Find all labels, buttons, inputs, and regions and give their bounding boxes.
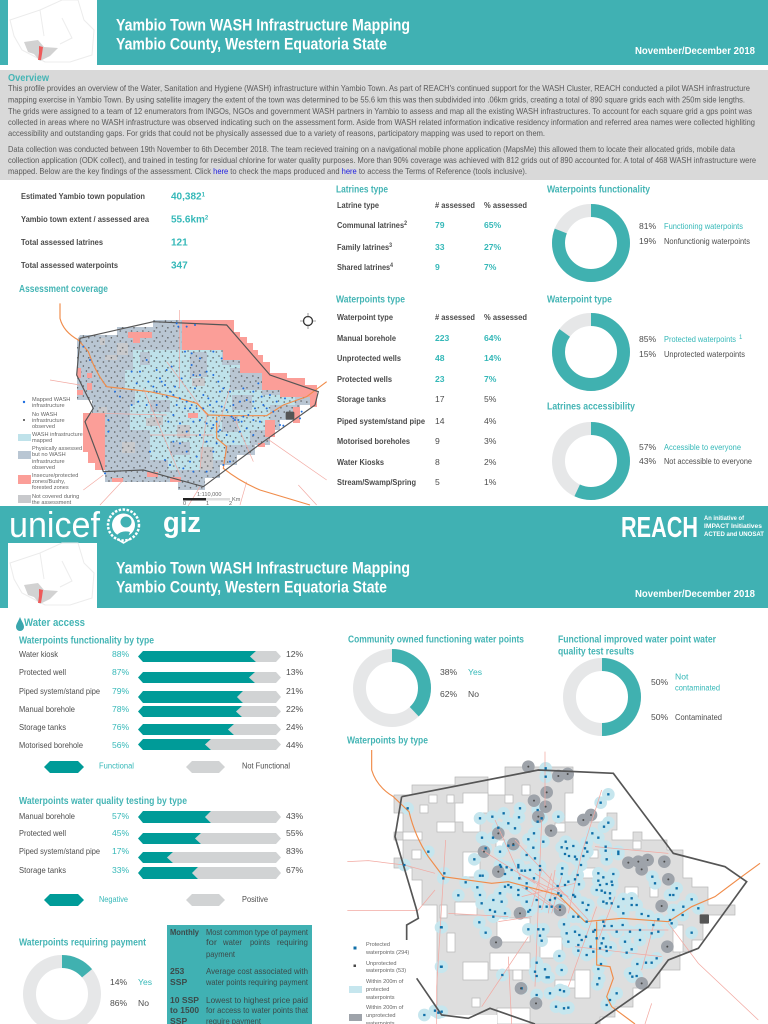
logo: REACH: IMPACT Initiatives xyxy=(704,523,762,530)
row labels: Piped system/stand pipe xyxy=(19,686,100,696)
donut chart 85% xyxy=(558,320,624,384)
title bottom: Yambio Town WASH Infrastructure Mapping xyxy=(116,558,410,578)
map legend: infrastructure xyxy=(32,418,65,424)
legend: 15% xyxy=(639,349,657,359)
table: latrines type: Latrine type xyxy=(337,200,379,210)
table: waterpoints type: Stream/Swamp/Spring xyxy=(337,477,416,487)
overview text: mapped. Below are the key findings of the assessment. Click here to check the maps produced and here to access the Terms of Reference (tools inclusive). xyxy=(8,166,527,176)
heading: Waterpoint type xyxy=(547,294,612,306)
water point buffers xyxy=(404,768,698,1015)
row labels: Piped system/stand pipe xyxy=(19,846,100,856)
key figures xyxy=(21,191,209,272)
callout: payment figures: requiring xyxy=(277,937,308,947)
legend: Positive xyxy=(242,894,268,904)
map legend: but no WASH xyxy=(32,452,66,458)
legend: Nonfunctionig waterpoints xyxy=(664,236,750,246)
map legend: Protected xyxy=(366,942,390,948)
legend xyxy=(110,977,152,1008)
key figures: 121 xyxy=(171,238,188,248)
map legend: Insecure/protected xyxy=(32,473,78,479)
callout: payment figures: Average cost associated with xyxy=(206,966,308,976)
logo: unicef: unicef xyxy=(9,504,101,545)
callout: payment figures: Monthly xyxy=(170,927,199,937)
row labels: Protected well xyxy=(19,667,66,677)
key figures: Estimated Yambio town population xyxy=(21,191,145,201)
table: waterpoints type: Piped system/stand pipe xyxy=(337,416,425,426)
callout: payment figures: payment xyxy=(206,949,236,959)
title bottom: Yambio County, Western Equatoria State xyxy=(116,578,387,596)
scale bar: 2 xyxy=(229,501,232,507)
table: latrines type: 33 xyxy=(435,242,445,252)
row labels: 17% xyxy=(112,846,130,856)
legend xyxy=(440,667,482,699)
table: latrines type: 27% xyxy=(484,242,502,252)
callout: payment figures: water points requiring payment xyxy=(205,977,309,987)
table: waterpoints type: 4% xyxy=(484,416,497,426)
legend: 1 xyxy=(739,335,743,341)
heading: Waterpoints functionality xyxy=(547,184,650,196)
table: waterpoints type: 48 xyxy=(435,353,445,363)
logo: REACH: An initiative of xyxy=(704,515,745,522)
table: waterpoints type: 14% xyxy=(484,353,502,363)
table: waterpoints type: # assessed xyxy=(435,312,475,322)
icon: compass xyxy=(300,313,316,329)
callout: payment figures: for access to water points that xyxy=(206,1005,309,1015)
title top xyxy=(116,16,410,54)
legend xyxy=(639,442,752,466)
table: latrines type: 79 xyxy=(435,220,445,230)
panel: waterpoints functionality xyxy=(547,184,750,276)
scale bar: Km xyxy=(232,497,241,503)
table: latrines type xyxy=(336,184,527,272)
callout: payment figures: for xyxy=(206,937,217,947)
locator map bottom xyxy=(8,543,97,609)
row labels: Storage tanks xyxy=(19,865,66,875)
row labels: 88% xyxy=(112,649,130,659)
row labels: 79% xyxy=(112,686,130,696)
header band bottom xyxy=(0,504,768,609)
legend: Accessible to everyone xyxy=(664,442,741,452)
scale bar: 1 xyxy=(206,501,209,507)
callout: payment figures: Lowest to highest price paid xyxy=(206,995,308,1005)
table: waterpoints type: Unprotected wells xyxy=(337,353,401,363)
table: waterpoints type: Protected wells xyxy=(337,374,392,384)
date bottom: November/December 2018 xyxy=(635,588,755,600)
map legend: Not covered during xyxy=(32,494,79,500)
row labels: 56% xyxy=(112,740,130,750)
legend: 14% xyxy=(110,977,128,987)
legend: Not accessible to everyone xyxy=(664,456,752,466)
heading: Functional improved water point water xyxy=(558,634,716,646)
legend: 19% xyxy=(639,236,657,246)
legend: contaminated xyxy=(675,682,720,692)
map legend: the assessment xyxy=(32,500,72,506)
heading: quality test results xyxy=(558,646,634,658)
map legend: observed xyxy=(32,465,55,471)
row labels: 67% xyxy=(286,865,304,875)
legend xyxy=(44,760,290,773)
callout: payment figures: Most common type of payment xyxy=(206,927,309,937)
table: waterpoints type: Water Kiosks xyxy=(337,457,384,467)
callout: payment figures xyxy=(167,925,312,1024)
table: latrines type: 2 xyxy=(404,221,408,227)
table: waterpoints type: 8 xyxy=(435,457,440,467)
callout: payment figures: 10 SSP xyxy=(170,995,199,1005)
row labels xyxy=(19,649,304,750)
panel: functional improved water point water quality test results xyxy=(558,634,722,730)
legend xyxy=(639,221,750,246)
table: waterpoints type: 5% xyxy=(484,394,497,404)
row labels: 44% xyxy=(286,740,304,750)
map legend: forested zones xyxy=(32,485,69,491)
table: waterpoints type: 23 xyxy=(435,374,445,384)
table: waterpoints type: 5 xyxy=(435,477,440,487)
map legend: Unprotected xyxy=(366,961,396,967)
heading xyxy=(558,634,716,658)
panel: waterpoints functionality by type xyxy=(19,634,304,773)
map legend: observed xyxy=(32,424,55,430)
scale bar: 1:110,000 xyxy=(197,492,221,498)
heading: Waterpoints requiring payment xyxy=(19,936,146,948)
map legend: zones/Bushy, xyxy=(32,479,66,485)
table: waterpoints type: % assessed xyxy=(484,312,527,322)
callout: payment figures: SSP xyxy=(170,977,187,987)
table: latrines type: 9 xyxy=(435,262,440,272)
table: latrines type: Family latrines xyxy=(337,242,397,252)
legend: Functional xyxy=(99,760,134,770)
overview heading: Overview xyxy=(8,72,50,84)
scale bar xyxy=(183,492,241,507)
legend: 50% xyxy=(651,712,669,722)
row labels: Protected well xyxy=(19,828,66,838)
icon: water drop xyxy=(16,617,24,631)
map legend: waterpoints xyxy=(365,995,395,1001)
logo: REACH: ACTED and UNOSAT xyxy=(704,531,764,538)
row labels: 87% xyxy=(112,667,130,677)
section heading: water access: Water access xyxy=(24,617,85,629)
panel: waterpoint type xyxy=(547,294,745,384)
map legend: WASH infrastructure xyxy=(32,432,83,438)
locator map top xyxy=(8,0,97,65)
callout: payment figures: to 1500 xyxy=(170,1005,199,1015)
logo: giz: giz xyxy=(163,507,201,539)
map: waterpoints by type xyxy=(347,750,760,1024)
legend: Yes xyxy=(468,667,482,677)
table: waterpoints type: 223 xyxy=(435,333,450,343)
panel: community owned functioning water points xyxy=(348,634,524,720)
legend: 38% xyxy=(440,667,458,677)
table: waterpoints type: Manual borehole xyxy=(337,333,396,343)
table: waterpoints type xyxy=(336,294,527,487)
row labels: Motorised borehole xyxy=(19,740,83,750)
row labels: 43% xyxy=(286,811,304,821)
legend: 86% xyxy=(110,998,128,1008)
legend: Functioning waterpoints xyxy=(664,221,743,231)
heading: Community owned functioning water points xyxy=(348,634,524,646)
row labels: 24% xyxy=(286,722,304,732)
table: latrines type: Communal latrines xyxy=(337,220,414,230)
heading: latrines type: Latrines type xyxy=(336,184,388,196)
heading: Waterpoints functionality by type xyxy=(19,634,154,646)
callout: payment figures: 253 xyxy=(170,966,185,976)
legend: 81% xyxy=(639,221,657,231)
row labels xyxy=(19,811,304,875)
map legend xyxy=(18,397,83,506)
callout: payment figures: water xyxy=(222,937,242,947)
key figures: Total assessed latrines xyxy=(21,237,103,247)
row labels: 12% xyxy=(286,649,304,659)
stacked bars xyxy=(138,811,281,879)
panel: waterpoints requiring payment xyxy=(19,936,152,1024)
key figures: 55.6km xyxy=(171,214,205,226)
legend: Not Functional xyxy=(242,760,290,770)
table: waterpoints type: Waterpoint type xyxy=(337,312,393,322)
map legend: infrastructure xyxy=(32,403,65,409)
legend: No xyxy=(468,689,479,699)
section heading: water access xyxy=(16,617,85,631)
row labels: 76% xyxy=(112,722,130,732)
table: waterpoints type: 1% xyxy=(484,477,497,487)
map legend: infrastructure xyxy=(32,459,65,465)
map legend: unprotected xyxy=(366,1013,396,1019)
row labels: 33% xyxy=(112,865,130,875)
table: waterpoints type: 14 xyxy=(435,416,445,426)
map legend: waterpoints (294) xyxy=(365,950,409,956)
legend: Protected waterpoints xyxy=(664,334,736,344)
title bottom xyxy=(116,558,410,596)
logo: REACH: REACH xyxy=(621,512,698,544)
heading: Waterpoints water quality testing by type xyxy=(19,795,187,807)
stacked bars xyxy=(138,651,281,750)
table: latrines type: % assessed xyxy=(484,200,527,210)
row labels: Storage tanks xyxy=(19,722,66,732)
key figures: Yambio town extent / assessed area xyxy=(21,214,149,224)
row labels: 55% xyxy=(286,828,304,838)
legend: 50% xyxy=(651,677,669,687)
overview text: accessibility and outstanding gaps. For grids that could not be physically assessed due to a variety of reasons, participatory mapping was used to report on them. xyxy=(8,128,545,138)
callout: payment figures: points xyxy=(250,937,270,947)
table: waterpoints type: 7% xyxy=(484,374,497,384)
row labels: Manual borehole xyxy=(19,704,75,714)
table: waterpoints type: Motorised boreholes xyxy=(337,436,410,446)
map legend: mapped xyxy=(32,438,52,444)
legend xyxy=(651,672,722,722)
table: latrines type: 3 xyxy=(389,243,393,249)
table: waterpoints type: 17 xyxy=(435,394,445,404)
table: latrines type: 4 xyxy=(390,263,394,269)
key figures: 40,382 xyxy=(171,192,202,202)
legend: Yes xyxy=(138,977,152,987)
key figures: 347 xyxy=(171,260,188,272)
water point markers xyxy=(404,768,698,1015)
map legend: No WASH xyxy=(32,412,57,418)
map legend: Mapped WASH xyxy=(32,397,70,403)
panel: waterpoints water quality testing by type xyxy=(19,795,304,906)
row labels: 22% xyxy=(286,704,304,714)
donut chart 14% xyxy=(30,962,94,1024)
heading: waterpoints by type: Waterpoints by type xyxy=(347,734,428,746)
table: waterpoints type: 9 xyxy=(435,436,440,446)
heading: waterpoints type: Waterpoints type xyxy=(336,294,405,306)
row labels: 13% xyxy=(286,667,304,677)
scale bar: 0 xyxy=(183,501,186,507)
heading: assessment coverage: Assessment coverage xyxy=(19,283,108,295)
row labels: 21% xyxy=(286,686,304,696)
donut chart 57% xyxy=(558,428,624,494)
legend: 43% xyxy=(639,456,657,466)
table: waterpoints type: 3% xyxy=(484,436,497,446)
map legend: Within 200m of xyxy=(366,1005,404,1011)
row labels: Water kiosk xyxy=(19,649,59,659)
legend: 62% xyxy=(440,689,458,699)
legend: Not xyxy=(675,672,689,682)
map legend: Physically assessed xyxy=(32,446,82,452)
row labels: 83% xyxy=(286,846,304,856)
donut chart 81% xyxy=(558,210,624,276)
key figures: Total assessed waterpoints xyxy=(21,260,118,270)
map legend: protected xyxy=(366,987,389,993)
legend xyxy=(639,334,745,359)
panel: latrines accessibility xyxy=(547,400,752,494)
table: latrines type: # assessed xyxy=(435,200,475,210)
heading: Latrines accessibility xyxy=(547,400,635,412)
legend: No xyxy=(138,998,149,1008)
donut chart 50% xyxy=(570,664,634,730)
table: waterpoints type: 2% xyxy=(484,457,497,467)
legend xyxy=(44,894,268,906)
key figures: 1 xyxy=(202,192,206,198)
panel: overview xyxy=(0,70,768,180)
row labels: 45% xyxy=(112,828,130,838)
title top: Yambio Town WASH Infrastructure Mapping xyxy=(116,16,410,34)
header band top xyxy=(0,0,768,65)
map legend: waterpoints (53) xyxy=(365,968,406,974)
row labels: 57% xyxy=(112,811,130,821)
row labels: Manual borehole xyxy=(19,811,75,821)
legend: 57% xyxy=(639,442,657,452)
map: assessment coverage xyxy=(18,303,327,508)
icon: unicef emblem xyxy=(108,510,139,543)
overview text xyxy=(8,83,756,176)
date top: November/December 2018 xyxy=(635,45,755,57)
table: waterpoints type: 64% xyxy=(484,333,502,343)
table: waterpoints type: Storage tanks xyxy=(337,394,386,404)
key figures: 2 xyxy=(205,216,209,222)
table: latrines type: 7% xyxy=(484,262,497,272)
map legend xyxy=(349,942,409,1024)
map legend: Within 200m of xyxy=(366,979,404,985)
row labels: 78% xyxy=(112,704,130,714)
legend: Negative xyxy=(99,894,128,904)
legend: Unprotected waterpoints xyxy=(664,349,745,359)
title top: Yambio County, Western Equatoria State xyxy=(116,34,387,54)
legend: Contaminated xyxy=(675,712,722,722)
donut chart 38% xyxy=(360,656,424,720)
table: latrines type: Shared latrines xyxy=(337,262,399,272)
legend: 85% xyxy=(639,334,657,344)
table: latrines type: 65% xyxy=(484,220,502,230)
